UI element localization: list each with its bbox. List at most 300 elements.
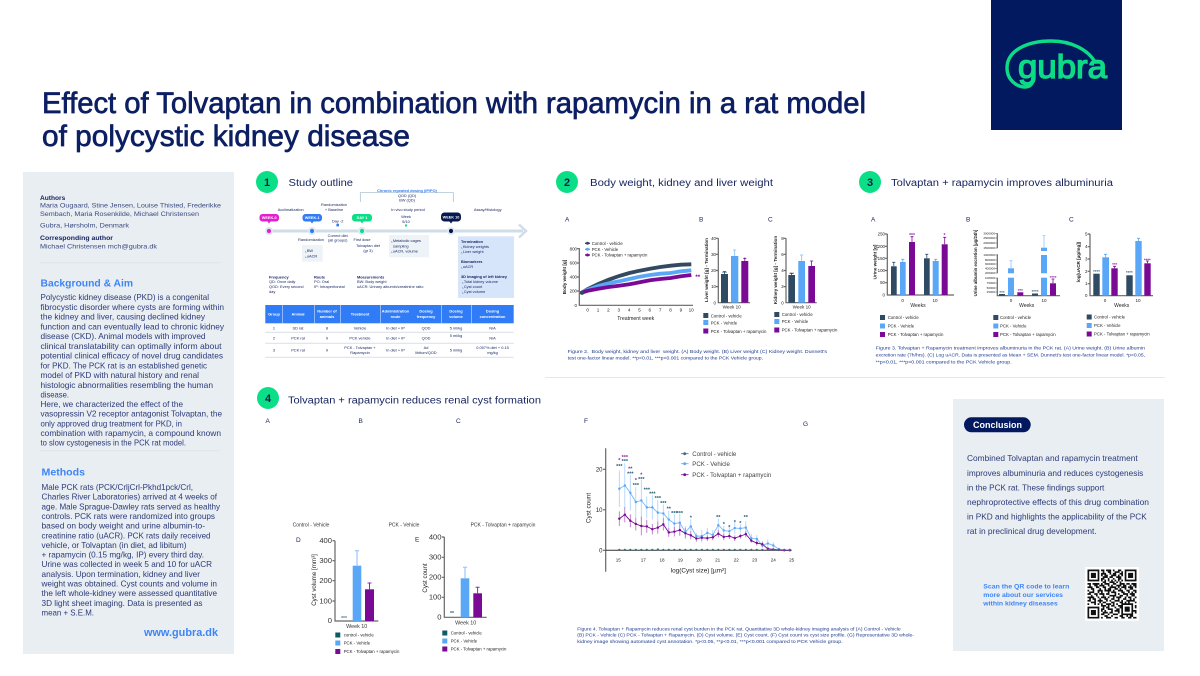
title: of polycystic kidney disease	[42, 120, 410, 153]
table: study groups: 9	[326, 348, 328, 352]
conclusion text: in the PCK rat. These findings support	[967, 482, 1105, 492]
chart 4F: cyst count vs cyst size line chart: **	[744, 515, 749, 521]
text block: background: to slow cystogenesis in the PCK rat model.	[40, 438, 186, 448]
chart 4F: cyst count vs cyst size line chart: F	[584, 418, 588, 425]
timeline: Chronic repeated dosing (IP/PO)	[377, 188, 438, 193]
chart 2A: body weight line chart: 7	[659, 308, 662, 312]
chart 4E: cyst count bars: 0	[437, 612, 442, 622]
section header 3: Tolvaptan + rapamycin improves albuminuria	[891, 178, 1113, 189]
table: study groups: route	[391, 314, 401, 319]
chart 2C: kidney weight bars: PCK - Tolvaptan + rapamycin	[782, 328, 838, 332]
text block: methods: creatinine ratio (uACR). PCK rats daily received	[42, 530, 211, 540]
chart 3A: urine weight bars: 200	[878, 244, 886, 249]
heading: methods: Methods	[42, 467, 85, 479]
chart 3B: urine albumin excretion broken-axis bars: 600000	[985, 262, 995, 266]
table: study groups: 5 ml/kg	[450, 348, 462, 352]
chart 3B: urine albumin excretion broken-axis bars: 10	[1041, 298, 1047, 303]
timeline: Biomarkers	[461, 259, 482, 264]
chart 2A: body weight line chart: 4	[628, 308, 631, 312]
chart 4F: cyst count vs cyst size line chart: 22	[734, 558, 739, 562]
chart 3C: log uACR bars: C	[1069, 216, 1074, 224]
table: study groups: Animal	[292, 312, 304, 316]
timeline: QOD: Every second	[269, 284, 304, 289]
conclusion text: improves albuminuria and reduces cystogenesis	[967, 468, 1143, 478]
QR call to action: Scan the QR code to learn	[983, 584, 1069, 591]
authors block: Corresponding author	[40, 235, 113, 242]
chart 3B: urine albumin excretion broken-axis bars: 0	[1010, 298, 1013, 303]
timeline: Route	[314, 274, 326, 280]
table: study groups: Dosing	[449, 308, 463, 314]
chart 2A: body weight line chart: 600	[570, 260, 578, 266]
chart 4F: cyst count vs cyst size line chart: 15	[616, 558, 621, 562]
timeline: WEEK 10	[443, 216, 459, 220]
chart 4E: cyst count bars: PCK - Vehicle	[451, 638, 478, 644]
chart 4F: cyst count vs cyst size line chart: *	[690, 516, 693, 522]
chart 2C: kidney weight bars: 0	[781, 300, 784, 306]
conclusion text: nephroprotective effects of this drug combination	[967, 497, 1149, 507]
chart 2A: body weight line chart: A	[565, 216, 570, 224]
chart 3B: urine albumin excretion broken-axis bars: ***	[999, 290, 1005, 295]
table: study groups: In diet + IP	[386, 326, 405, 330]
chart 2C: kidney weight bars: PCK - Vehicle	[782, 319, 809, 324]
chart 4F: cyst count vs cyst size line chart: ***	[638, 477, 645, 483]
table: study groups: PCK rat	[291, 336, 306, 340]
section 2: body, kidney and liver weight	[556, 171, 838, 362]
section header 1: Study outline	[288, 178, 353, 189]
title	[42, 87, 866, 153]
chart 4D: cyst volume bars: D	[296, 537, 301, 544]
chart 3C: log uACR bars: 2	[1085, 269, 1088, 274]
chart 3A: urine weight bars: A	[871, 216, 876, 224]
chart 2C: kidney weight bars: C	[768, 216, 773, 224]
chart 4F: cyst count vs cyst size line chart: PCK - Vehicle	[692, 461, 731, 468]
table: study groups: frequency	[417, 314, 436, 319]
chart 4F: cyst count vs cyst size line chart: 25	[789, 558, 795, 562]
caption: figure 4	[577, 626, 914, 645]
chart 4F: cyst count vs cyst size line chart: Cyst count	[586, 493, 592, 523]
text block: background: function and can eventually lead to chronic kidney	[40, 321, 225, 331]
chart 4D: cyst volume bars: PCK - Tolvaptan + rapamycin	[344, 649, 400, 654]
chart 3B: urine albumin excretion broken-axis bars: PCK - Tolvaptan + rapamycin	[1000, 332, 1056, 337]
chart 3C: log uACR bars: PCK - Tolvaptan + rapamycin	[1094, 332, 1150, 336]
icon: QR code	[1085, 567, 1139, 621]
logo: gubra	[991, 0, 1122, 130]
chart 3B: urine albumin excretion broken-axis bars: Urine albumin excretion [µg/24h]	[973, 229, 978, 296]
timeline: day	[269, 289, 275, 294]
section header 4: 4	[265, 393, 272, 405]
chart 4F: cyst count vs cyst size line chart	[584, 418, 795, 574]
timeline: QD: Once daily	[269, 279, 295, 284]
chart 2A: body weight line chart: 10	[689, 308, 694, 312]
chart 4F: cyst count vs cyst size line chart: *	[739, 521, 742, 527]
chart 4E: cyst count bars: **	[450, 611, 454, 617]
chart 3B: urine albumin excretion broken-axis bars: 800000	[985, 258, 995, 262]
timeline: Correct diet	[328, 233, 349, 238]
caption: figure 3: excretion rate (7h/hrs). (C) Log uACR. Data is presented as Mean + SEM. Dunnett's test one-factor linear model. *p<0.05,	[876, 352, 1145, 358]
chart 2C: kidney weight bars	[768, 216, 838, 332]
chart 3B: urine albumin excretion broken-axis bars: 25000	[987, 290, 995, 294]
chart 4D: cyst volume bars: 400	[319, 536, 332, 545]
caption: figure 3	[876, 346, 1145, 366]
chart 2A: body weight line chart: 8	[669, 308, 672, 312]
chart 2B: liver weight bars	[699, 216, 767, 334]
chart 3B: urine albumin excretion broken-axis bars: 100000	[985, 276, 995, 280]
chart 3B: urine albumin excretion broken-axis bars: B	[966, 216, 970, 224]
chart 4F: cyst count vs cyst size line chart: *	[618, 458, 621, 464]
chart 4F: cyst count vs cyst size line chart: ***	[616, 464, 623, 470]
chart 3C: log uACR bars: 5	[1085, 232, 1088, 236]
chart 2A: body weight line chart: Treatment week	[617, 316, 655, 322]
authors block: Gubra, Hørsholm, Denmark	[40, 222, 130, 230]
chart 3B: urine albumin excretion broken-axis bars	[966, 216, 1060, 337]
caption: figure 2: Figure 2. Body weight, kidney and liver weight. (A) Body weight. (B) Liver weight (C) Kidney weight. Dunnett's	[568, 349, 828, 355]
chart 2A: body weight line chart: PCK - Vehicle	[592, 247, 619, 252]
chart 2C: kidney weight bars: ***	[789, 271, 794, 276]
text block: background: fibrocystic disorder where cysts are forming within	[40, 302, 224, 312]
text block: background: clinical translatability can optimally inform about	[40, 341, 222, 351]
timeline: Week	[401, 214, 411, 219]
chart 3C: log uACR bars: log(uACR [µg/mg])	[1076, 241, 1081, 282]
chart 4D: cyst volume bars	[296, 536, 400, 654]
authors block	[40, 195, 221, 250]
timeline: ⌞Cyst count	[462, 284, 483, 289]
timeline: BW (QD)	[399, 198, 416, 203]
table: study groups: PCK - Tolvaptan +	[344, 345, 376, 350]
authors block: Authors	[40, 195, 66, 202]
chart 3B: urine albumin excretion broken-axis bars: 2000000	[983, 241, 995, 245]
timeline: ⌞Liver weight	[461, 249, 485, 254]
chart 3A: urine weight bars: 150	[878, 256, 886, 261]
chart 4F: cyst count vs cyst size line chart: 19	[678, 558, 683, 562]
timeline: Assay/Histology	[474, 207, 502, 212]
timeline: (gr 3)	[363, 248, 373, 253]
chart 2A: body weight line chart: 1	[597, 308, 600, 312]
chart 4F: cyst count vs cyst size line chart: *	[734, 520, 737, 526]
timeline: (all groups)	[328, 238, 348, 242]
chart 4D: cyst volume bars: 200	[319, 576, 332, 585]
table: study groups: Vehicle	[354, 326, 366, 330]
chart 4E: cyst count bars: Control - vehicle	[451, 630, 482, 636]
chart 2A: body weight line chart: PCK - Tolvaptan + rapamycin	[592, 252, 648, 258]
chart 4F: cyst count vs cyst size line chart: PCK - Tolvaptan + rapamycin	[692, 472, 771, 479]
text block: background: only approved drug treatment for PKD, in	[40, 418, 182, 428]
chart 4E: cyst count bars: Cyst count	[422, 563, 429, 593]
chart 3A: urine weight bars: 100	[878, 268, 886, 273]
timeline: ⌞uACR, volume	[391, 248, 418, 254]
caption: figure 2	[568, 349, 828, 362]
chart 3A: urine weight bars: ***	[909, 233, 915, 239]
text block: methods: age. Male Sprague-Dawley rats served as healthy	[42, 501, 221, 511]
chart 2A: body weight line chart: 5	[638, 308, 641, 312]
text block: methods: weight was obtained. Cyst counts and volume in	[41, 578, 217, 588]
table: study groups: animals	[320, 314, 334, 319]
authors block: Sembach, Maria Rosenkilde, Michael Christensen	[40, 211, 199, 218]
text block: methods: controls. PCK rats were randomized into groups	[42, 511, 215, 521]
panel label G: G	[803, 421, 808, 428]
chart 4F: cyst count vs cyst size line chart: ***	[644, 487, 651, 493]
chart 3A: urine weight bars: PCK - Vehicle	[888, 324, 915, 328]
chart 4E: cyst count bars: 300	[429, 552, 442, 562]
chart 2B: liver weight bars: PCK - Vehicle	[711, 320, 738, 325]
caption: figure 4: (B) PCK - Vehicle (C) PCK - Tolvaptan + Rapamycin. (D) Cyst volume. (E) Cyst count. (F) Cyst count vs cyst size profile. (G) Representative 3D whole-	[577, 633, 914, 639]
chart 2A: body weight line chart: 6	[649, 308, 652, 312]
chart 3B: urine albumin excretion broken-axis bars: Weeks	[1019, 303, 1035, 309]
chart 2A: body weight line chart: Body weight [g]	[562, 259, 567, 294]
timeline: In vivo study period	[391, 207, 425, 212]
table: study groups: 0.057% diet + 0.15	[476, 345, 509, 350]
table: study groups: Dosing	[486, 308, 500, 314]
table: study groups: 3	[273, 348, 275, 352]
chart 3B: urine albumin excretion broken-axis bars: ****	[1050, 275, 1057, 280]
chart 4F: cyst count vs cyst size line chart: 21	[715, 558, 721, 562]
text block: background: the kidney and liver, causing declined kidney	[40, 312, 206, 322]
chart 2B: liver weight bars: B	[699, 216, 703, 224]
table: study groups: Group	[268, 312, 280, 316]
chart 2A: body weight line chart: 2	[607, 308, 610, 312]
chart 4E: cyst count bars: PCK - Tolvaptan + rapamycin	[451, 646, 507, 652]
chart 3A: urine weight bars: PCK - Tolvaptan + rapamycin	[888, 332, 944, 337]
chart 2B: liver weight bars: 40	[711, 236, 717, 241]
caption: figure 2: test one-factor linear model. **p<0.01, ***p<0.001 compared to the PCK Vehicle group.	[568, 356, 763, 362]
table: study groups: N/A	[489, 336, 496, 340]
table: study groups: 2	[273, 336, 275, 340]
chart 3B: urine albumin excretion broken-axis bars: ***	[1018, 288, 1023, 293]
table: study groups: Administration	[382, 308, 410, 314]
panel labels A B C with image captions: B	[358, 418, 363, 425]
chart 3C: log uACR bars: 3	[1085, 256, 1088, 262]
chart 3B: urine albumin excretion broken-axis bars: 75000	[987, 281, 995, 285]
chart 4D: cyst volume bars: ***	[341, 616, 347, 622]
text block: background: vasopressin V2 receptor antagonist Tolvaptan, the	[40, 408, 222, 418]
timeline: ⌞BW	[305, 248, 313, 253]
chart 2B: liver weight bars: 20	[711, 268, 717, 273]
chart 2B: liver weight bars: Week 10	[723, 304, 741, 310]
section header 4: Tolvaptan + rapamycin reduces renal cyst formation	[288, 396, 541, 406]
table: study groups: N/A	[489, 326, 496, 330]
section header 2: Body weight, kidney and liver weight	[590, 178, 773, 189]
timeline: IP: Intraperitoneal	[314, 284, 345, 289]
table: study groups: Rapamycin	[350, 350, 370, 355]
chart 4E: cyst count bars	[415, 532, 507, 652]
chart 3C: log uACR bars: 10	[1135, 298, 1141, 303]
chart 2B: liver weight bars: *	[744, 256, 746, 261]
chart 4E: cyst count bars: 400	[429, 532, 442, 542]
text block: background: Here, we characterized the effect of the	[40, 399, 183, 409]
chart 4E: cyst count bars: 200	[429, 572, 442, 582]
table: study groups: 5 ml/kg	[450, 326, 462, 330]
chart 2C: kidney weight bars: 8	[781, 236, 784, 241]
timeline: 5/10	[402, 219, 411, 224]
caption: figure 4: kidney image showing automated cyst annotation. *p<0.05, **p<0.01, ***p<0.001 compared to PCK Vehicle group.	[577, 639, 843, 645]
chart 4F: cyst count vs cyst size line chart: ***	[622, 459, 629, 465]
table: study groups: concentration	[480, 314, 506, 319]
chart 3A: urine weight bars: Control - vehicle	[888, 315, 919, 320]
chart 3C: log uACR bars: 4	[1085, 244, 1088, 249]
timeline: ⌞Total kidney volume	[462, 279, 498, 284]
QR call to action	[982, 584, 1069, 608]
timeline: ⌞uACR	[305, 254, 317, 258]
section header 3	[859, 171, 1113, 193]
timeline: QOD (QD)	[398, 193, 417, 198]
authors block: Maria Ougaard, Stine Jensen, Louise Thisted, Frederikke	[40, 202, 221, 210]
chart 4D: cyst volume bars: 300	[319, 556, 332, 565]
table: study groups: SD rat	[292, 326, 304, 330]
chart 2B: liver weight bars: 30	[711, 252, 717, 257]
timeline: PO: Oral	[314, 279, 329, 284]
section header 3: 3	[867, 177, 873, 189]
panel labels A B C with image captions: A	[266, 418, 270, 425]
chart 4F: cyst count vs cyst size line chart: 20	[696, 558, 702, 562]
chart 3B: urine albumin excretion broken-axis bars: 2500000	[983, 236, 995, 240]
text block: background: combination with rapamycin, a compound known	[40, 428, 221, 438]
timeline: ⌞Kidney weights	[461, 244, 489, 249]
chart 3A: urine weight bars: *	[944, 233, 946, 239]
chart 3C: log uACR bars	[1069, 216, 1153, 336]
chart 2A: body weight line chart: 200	[570, 288, 578, 294]
table: study groups: Treatment	[351, 312, 370, 316]
chart 4F: cyst count vs cyst size line chart: ***	[677, 511, 684, 517]
chart 3A: urine weight bars: 0	[883, 292, 886, 298]
table: study groups: 1	[273, 326, 275, 330]
panel: sidebar	[23, 172, 234, 654]
chart 2A: body weight line chart: 9	[680, 308, 683, 312]
timeline: ⌞Metabolic cages	[391, 238, 421, 243]
chart 2C: kidney weight bars: 2	[781, 284, 784, 289]
chart 3C: log uACR bars: Weeks	[1114, 303, 1130, 309]
text block: methods	[41, 482, 221, 617]
table: study groups	[265, 305, 514, 357]
section header 4	[257, 387, 541, 409]
table: study groups: PCK vehicle	[349, 336, 371, 340]
chart 3B: urine albumin excretion broken-axis bars: Control - vehicle	[1000, 315, 1032, 320]
chart 3B: urine albumin excretion broken-axis bars: 3000000	[983, 232, 995, 236]
conclusion text: rat in preclinical drug development.	[967, 526, 1097, 536]
chart 3B: urine albumin excretion broken-axis bars: 400000	[985, 266, 995, 270]
chart 4F: cyst count vs cyst size line chart: *	[640, 473, 643, 479]
chart 3B: urine albumin excretion broken-axis bars: 1000000	[983, 253, 995, 257]
chart 3A: urine weight bars: 250	[878, 232, 886, 236]
chart 3C: log uACR bars: ****	[1093, 269, 1100, 274]
chart 3A: urine weight bars: 50	[880, 280, 886, 285]
text block: methods: Charles River Laboratories) arrived at 4 weeks of	[42, 492, 218, 502]
text block: background: model of PKD with natural history and renal	[40, 370, 199, 380]
title: Effect of Tolvaptan in combination with rapamycin in a rat model	[42, 87, 866, 120]
text block: methods: Urine was collected in week 5 and 10 for uACR	[42, 559, 212, 569]
chart 4F: cyst count vs cyst size line chart: *	[723, 522, 726, 528]
timeline: Randomization	[298, 237, 324, 242]
text block: methods: Male PCK rats (PCK/CrljCrl-Pkhd1pck/Crl,	[42, 482, 193, 492]
chart 4F: cyst count vs cyst size line chart: 20	[596, 468, 603, 474]
text block: background: potential clinical efficacy of novel drug candidates	[40, 350, 223, 360]
timeline: ⌞uACR	[461, 264, 473, 269]
chart 4F: cyst count vs cyst size line chart: ***	[649, 492, 656, 498]
chart 4F: cyst count vs cyst size line chart: **	[628, 467, 633, 473]
panel: conclusion	[953, 399, 1164, 651]
chart 3C: log uACR bars: 1	[1085, 281, 1088, 286]
chart 4F: cyst count vs cyst size line chart: 0	[599, 548, 603, 554]
chart 2C: kidney weight bars: Week 10	[793, 304, 811, 310]
text block: methods: the left whole-kidney were assessed quantitative	[42, 588, 217, 598]
table: study groups: libitum/QOD	[415, 350, 437, 355]
table: study groups: QOD	[422, 326, 431, 330]
text block: background: disease.	[40, 390, 69, 400]
text block: methods: + rapamycin (0.15 mg/kg, IP) every third day.	[42, 550, 204, 560]
section header 2: 2	[564, 177, 570, 189]
text block: methods: based on body weight and urine albumin-to-	[42, 521, 205, 531]
panel labels A B C with image captions: PCK - Vehicle	[389, 522, 420, 528]
table: study groups: mg/kg	[487, 350, 498, 355]
chart 4F: cyst count vs cyst size line chart: 17	[641, 558, 646, 562]
table: study groups: 9	[326, 336, 328, 340]
chart 3C: log uACR bars: Control - vehicle	[1094, 314, 1126, 320]
chart 2C: kidney weight bars: Control - vehicle	[782, 312, 813, 317]
chart 3B: urine albumin excretion broken-axis bars: 200000	[985, 271, 995, 275]
section 1: study outline	[256, 171, 526, 357]
chart 4E: cyst count bars: Week 10	[455, 620, 476, 626]
QR call to action: within kidney diseases	[982, 600, 1058, 608]
timeline: sampling	[393, 244, 409, 248]
timeline: BW: Body weight	[357, 279, 387, 284]
chart 4F: cyst count vs cyst size line chart: ***	[655, 496, 662, 502]
section 4: renal cyst formation	[257, 387, 914, 654]
chart 4F: cyst count vs cyst size line chart: ***	[622, 455, 629, 461]
conclusion text: in PKD and highlights the applicability of the PCK	[967, 511, 1147, 521]
chart 4F: cyst count vs cyst size line chart: 18	[659, 558, 665, 562]
chart 4F: cyst count vs cyst size line chart: **	[667, 506, 672, 512]
text block: background: disease (CKD). Animal models with improved	[40, 331, 206, 341]
chart 3C: log uACR bars: ****	[1126, 270, 1133, 275]
chart 2B: liver weight bars: Control - vehicle	[711, 313, 742, 318]
caption: figure 4: Figure 4. Tolvaptan + Rapamycin reduces renal cyst burden in the PCK rat. Quantitative 3D whole-kidney imaging analysis of (A) Control - Vehicle	[577, 626, 901, 632]
chart 2A: body weight line chart: **	[695, 275, 701, 281]
chart 4D: cyst volume bars: 100	[319, 596, 332, 606]
timeline: Frequency	[269, 274, 290, 280]
chart 3A: urine weight bars: Urine weight [g]	[872, 244, 878, 279]
text block: background	[40, 292, 225, 448]
section header 2	[556, 171, 773, 193]
chart 3A: urine weight bars: 10	[932, 298, 938, 303]
timeline: Termination	[461, 239, 484, 244]
conclusion pill heading	[964, 417, 1031, 432]
section 3: albuminuria	[859, 171, 1153, 366]
conclusion text	[967, 453, 1149, 536]
panel labels A B C with image captions	[266, 418, 536, 528]
conclusion pill heading: Conclusion	[973, 420, 1022, 430]
table: study groups: Dosing	[419, 308, 433, 314]
chart 2A: body weight line chart: 400	[570, 274, 578, 280]
chart 4F: cyst count vs cyst size line chart: log(Cyst size) [µm²]	[671, 568, 726, 574]
chart 3B: urine albumin excretion broken-axis bars: PCK - Vehicle	[1000, 324, 1027, 328]
chart 4F: cyst count vs cyst size line chart: 24	[771, 558, 776, 562]
chart 3C: log uACR bars: ****	[1144, 258, 1151, 262]
timeline	[260, 188, 526, 298]
chart 2A: body weight line chart: 800	[570, 246, 578, 252]
table: study groups: Ad	[424, 345, 428, 350]
chart 2A: body weight line chart: 0	[575, 303, 578, 308]
table: study groups: Number of	[317, 308, 337, 314]
chart 3C: log uACR bars: ***	[1112, 262, 1118, 267]
chart 4D: cyst volume bars: 0	[328, 616, 332, 625]
chart 4F: cyst count vs cyst size line chart: ***	[671, 511, 678, 517]
table: study groups: 5 ml/kg	[450, 333, 462, 338]
text block: background: for PKD. The PCK rat is an established genetic	[40, 360, 207, 370]
chart 3C: log uACR bars: PCK - Vehicle	[1094, 323, 1121, 328]
chart 2B: liver weight bars: 0	[714, 300, 717, 306]
chart 2C: kidney weight bars: 6	[781, 252, 784, 257]
chart 2C: kidney weight bars: Kidney weight [g] - Termination	[773, 236, 778, 304]
timeline: WEEK-1	[305, 216, 320, 220]
chart 2B: liver weight bars: Liver weight [g] - Termination	[704, 238, 709, 302]
